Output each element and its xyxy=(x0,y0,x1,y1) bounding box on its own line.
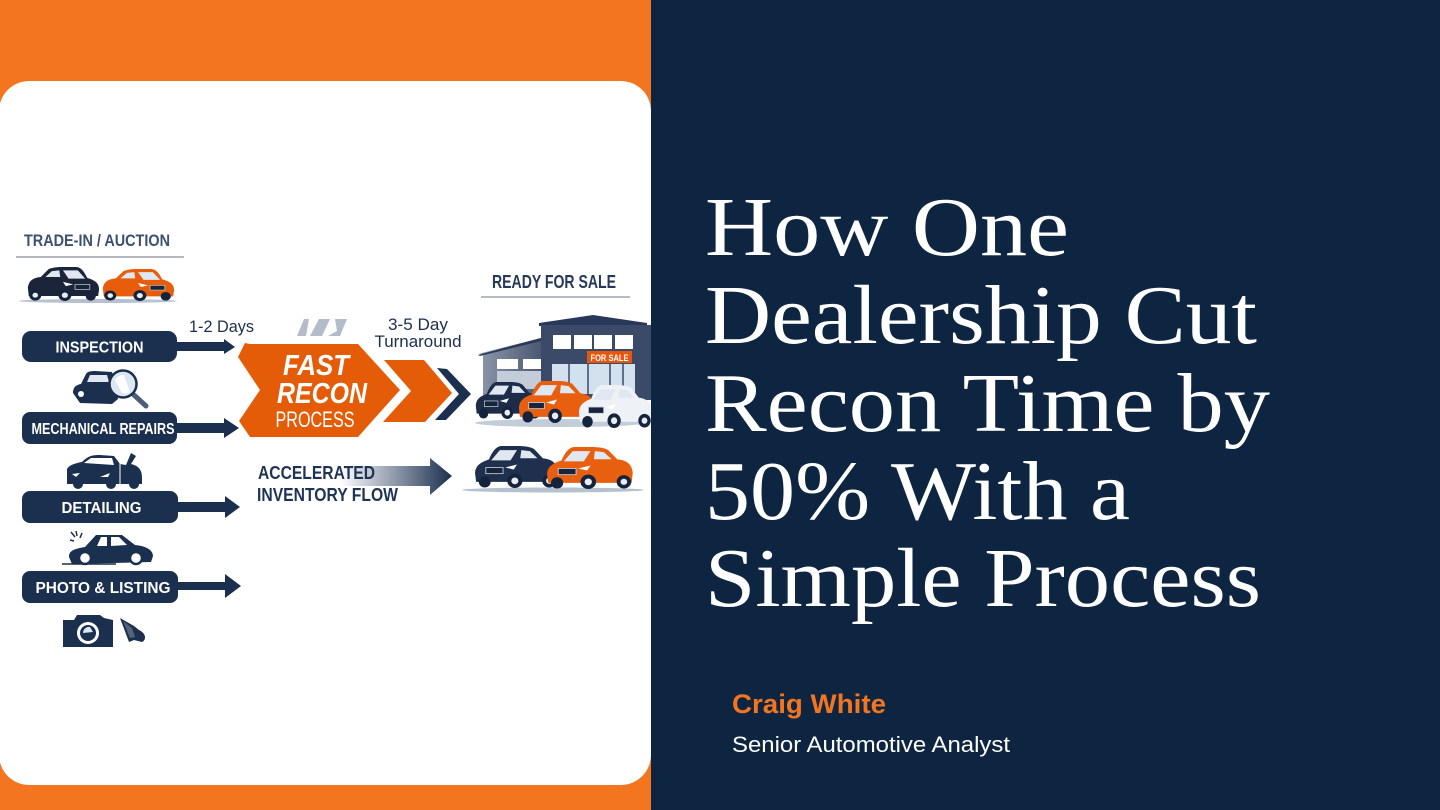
step: photo and listing: PHOTO & LISTING xyxy=(36,580,170,597)
chevron: navy xyxy=(435,368,471,420)
illustration: lower cars xyxy=(462,446,644,492)
label: accelerated inventory flow xyxy=(258,466,398,501)
author role: Senior Automotive Analyst xyxy=(732,732,1011,757)
chevron: orange xyxy=(383,360,452,422)
step: inspection: INSPECTION xyxy=(56,340,144,356)
fast recon process chevron xyxy=(238,343,400,437)
author name: Craig White xyxy=(732,689,886,719)
heading: trade-in / auction: TRADE-IN / AUCTION xyxy=(24,231,170,250)
illustration: dealership cars xyxy=(475,381,652,428)
label: accelerated inventory flow: ACCELERATED xyxy=(258,463,375,483)
step: photo and listing xyxy=(22,571,241,603)
step: detailing: DETAILING xyxy=(62,500,142,517)
label: accelerated inventory flow: INVENTORY FLOW xyxy=(257,485,398,505)
title: How One xyxy=(705,181,1069,274)
title xyxy=(705,181,1270,625)
step: detailing xyxy=(22,491,240,523)
icon: trade-in cars xyxy=(19,267,177,303)
white illustration card xyxy=(0,81,652,785)
title: 50% With a xyxy=(705,445,1130,538)
icon: camera and tag xyxy=(63,615,145,647)
fast recon process chevron: RECON xyxy=(277,378,368,410)
fast recon process chevron: FAST xyxy=(283,350,351,382)
fast recon process chevron: PROCESS xyxy=(276,407,354,432)
icon: car with sparkle xyxy=(62,531,153,564)
sign: for sale: FOR SALE xyxy=(590,353,628,364)
icon: car with magnifier xyxy=(73,370,146,406)
label: 3-5 day turnaround: Turnaround xyxy=(374,332,462,351)
orange background panel xyxy=(0,0,651,810)
title: Dealership Cut xyxy=(705,269,1257,362)
title: Recon Time by xyxy=(705,357,1270,450)
icon: detailing car xyxy=(67,453,142,489)
step: mechanical repairs xyxy=(22,412,239,444)
label: 3-5 day turnaround: 3-5 Day xyxy=(388,315,448,334)
sign: for sale xyxy=(587,351,632,364)
title: Simple Process xyxy=(705,532,1261,625)
icon: decorative speed stripes xyxy=(297,319,347,336)
heading: ready for sale: READY FOR SALE xyxy=(492,272,616,292)
illustration: dealership building xyxy=(478,315,651,400)
label: 3-5 day turnaround xyxy=(374,318,460,347)
step: mechanical repairs: MECHANICAL REPAIRS xyxy=(32,421,175,438)
step: inspection xyxy=(22,331,235,362)
navy background panel xyxy=(651,0,1440,810)
label: 1-2 days: 1-2 Days xyxy=(189,317,254,336)
arrow: accelerated inventory flow xyxy=(340,458,452,495)
